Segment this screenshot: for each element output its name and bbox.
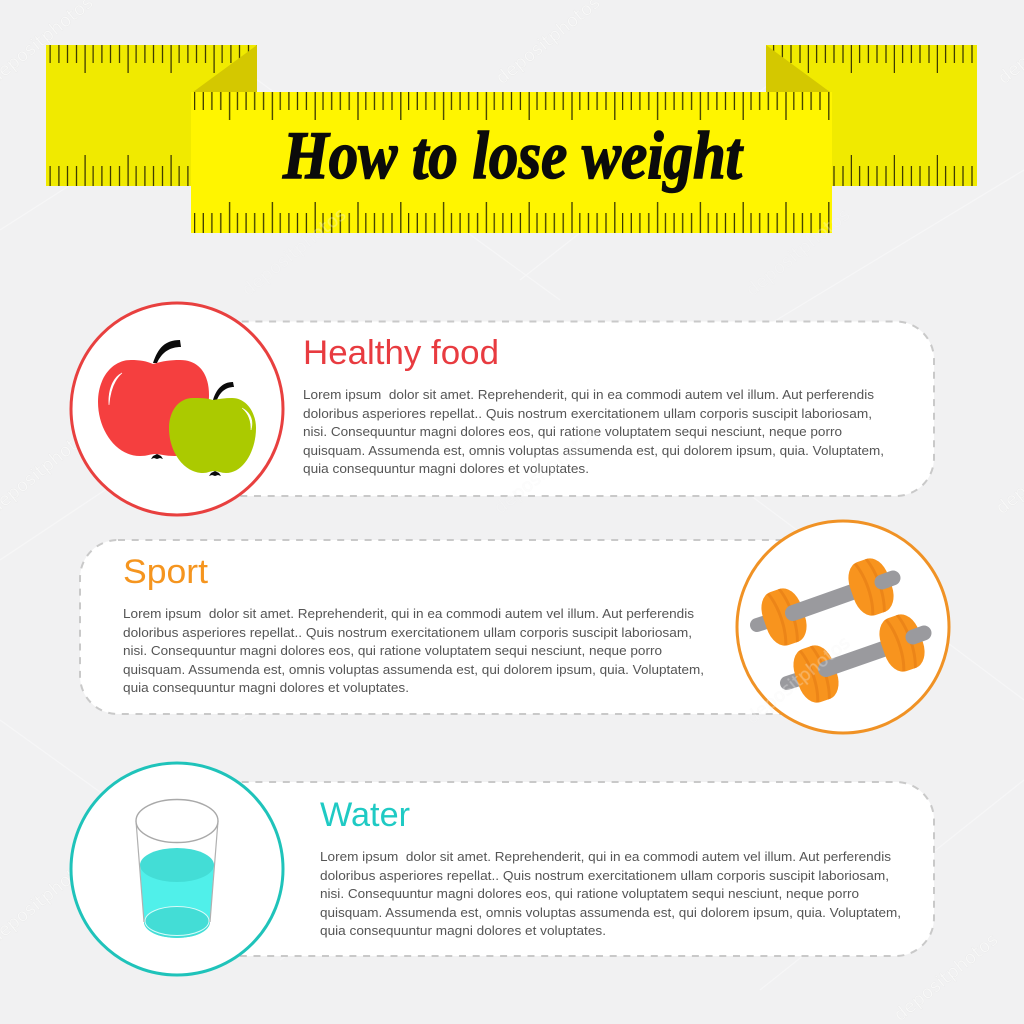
text block: sport: doloribus asperiores repellat.. Quis nostrum exercitationem ullam corporis suscipit laboriosam, xyxy=(123,626,692,640)
watermark background layer: depositphotos xyxy=(890,929,1002,1024)
text block: sport: quisquam. Assumenda est, omnis voluptas assumenda est, qui dolorem ipsum, quia. Voluptatem, xyxy=(123,663,704,677)
left back ribbon xyxy=(46,45,257,186)
text block: sport: nisi. Consequuntur magni dolores eos, qui ratione voluptatem sequi nesciunt, neque porro xyxy=(123,644,662,658)
icon: lower dumbbell xyxy=(787,610,930,707)
watermark foreground layer: depositphotos xyxy=(238,204,350,301)
text block: water xyxy=(320,850,901,938)
icon: upper dumbbell xyxy=(756,554,899,650)
text block: water: doloribus asperiores repellat.. Quis nostrum exercitationem ullam corporis suscipit laboriosam, xyxy=(320,869,889,883)
text block: water: quisquam. Assumenda est, omnis voluptas assumenda est, qui dolorem ipsum, quia. Voluptatem, xyxy=(320,906,901,920)
text block: healthy food: quisquam. Assumenda est, omnis voluptas assumenda est, qui dolorem ipsum, quia. Voluptatem, xyxy=(303,444,884,458)
text block: healthy food xyxy=(303,388,884,476)
watermark foreground layer: depositphotos xyxy=(742,204,854,301)
panel: sport xyxy=(80,521,949,733)
watermark foreground layer: depositphotos xyxy=(742,632,854,729)
heading: water: Water xyxy=(320,796,410,834)
card background xyxy=(80,540,820,714)
panel: water xyxy=(71,763,934,975)
text block: water: nisi. Consequuntur magni dolores eos, qui ratione voluptatem sequi nesciunt, neque porro xyxy=(320,887,859,901)
icon: red apple xyxy=(98,340,209,459)
ribbon fold shadow left xyxy=(193,45,257,92)
card background xyxy=(190,782,934,956)
heading: sport: Sport xyxy=(123,553,208,591)
icon circle: red xyxy=(71,303,283,515)
icon circle: orange xyxy=(737,521,949,733)
text block: healthy food: Lorem ipsum dolor sit amet. Reprehenderit, qui in ea commodi autem vel illum. Aut perferendis xyxy=(303,388,874,402)
text block: healthy food: nisi. Consequuntur magni dolores eos, qui ratione voluptatem sequi nesciunt, neque porro xyxy=(303,425,842,439)
right back ribbon xyxy=(766,45,977,186)
watermark foreground layer: depositphotos xyxy=(490,422,602,519)
text block: sport: quia consequuntur magni dolores et voluptates. xyxy=(123,681,409,695)
text block: healthy food: quia consequuntur magni dolores et voluptates. xyxy=(303,462,589,476)
panel: healthy food xyxy=(71,303,934,515)
card background xyxy=(190,322,934,496)
text block: water: Lorem ipsum dolor sit amet. Reprehenderit, qui in ea commodi autem vel illum. Aut perferendis xyxy=(320,850,891,864)
text block: sport xyxy=(123,607,704,695)
icon: water glass xyxy=(136,800,218,938)
text block: sport: Lorem ipsum dolor sit amet. Reprehenderit, qui in ea commodi autem vel illum. Aut perferendis xyxy=(123,607,694,621)
title: How to lose weight xyxy=(282,117,744,193)
text block: water: quia consequuntur magni dolores et voluptates. xyxy=(320,924,606,938)
icon circle: teal xyxy=(71,763,283,975)
heading: healthy food: Healthy food xyxy=(303,334,499,372)
text block: healthy food: doloribus asperiores repellat.. Quis nostrum exercitationem ullam corporis suscipit laboriosam, xyxy=(303,407,872,421)
ribbon fold shadow right xyxy=(766,45,830,92)
main tape measure banner xyxy=(191,92,832,233)
watermark foreground layer xyxy=(238,204,854,729)
icon: green apple xyxy=(169,382,256,476)
